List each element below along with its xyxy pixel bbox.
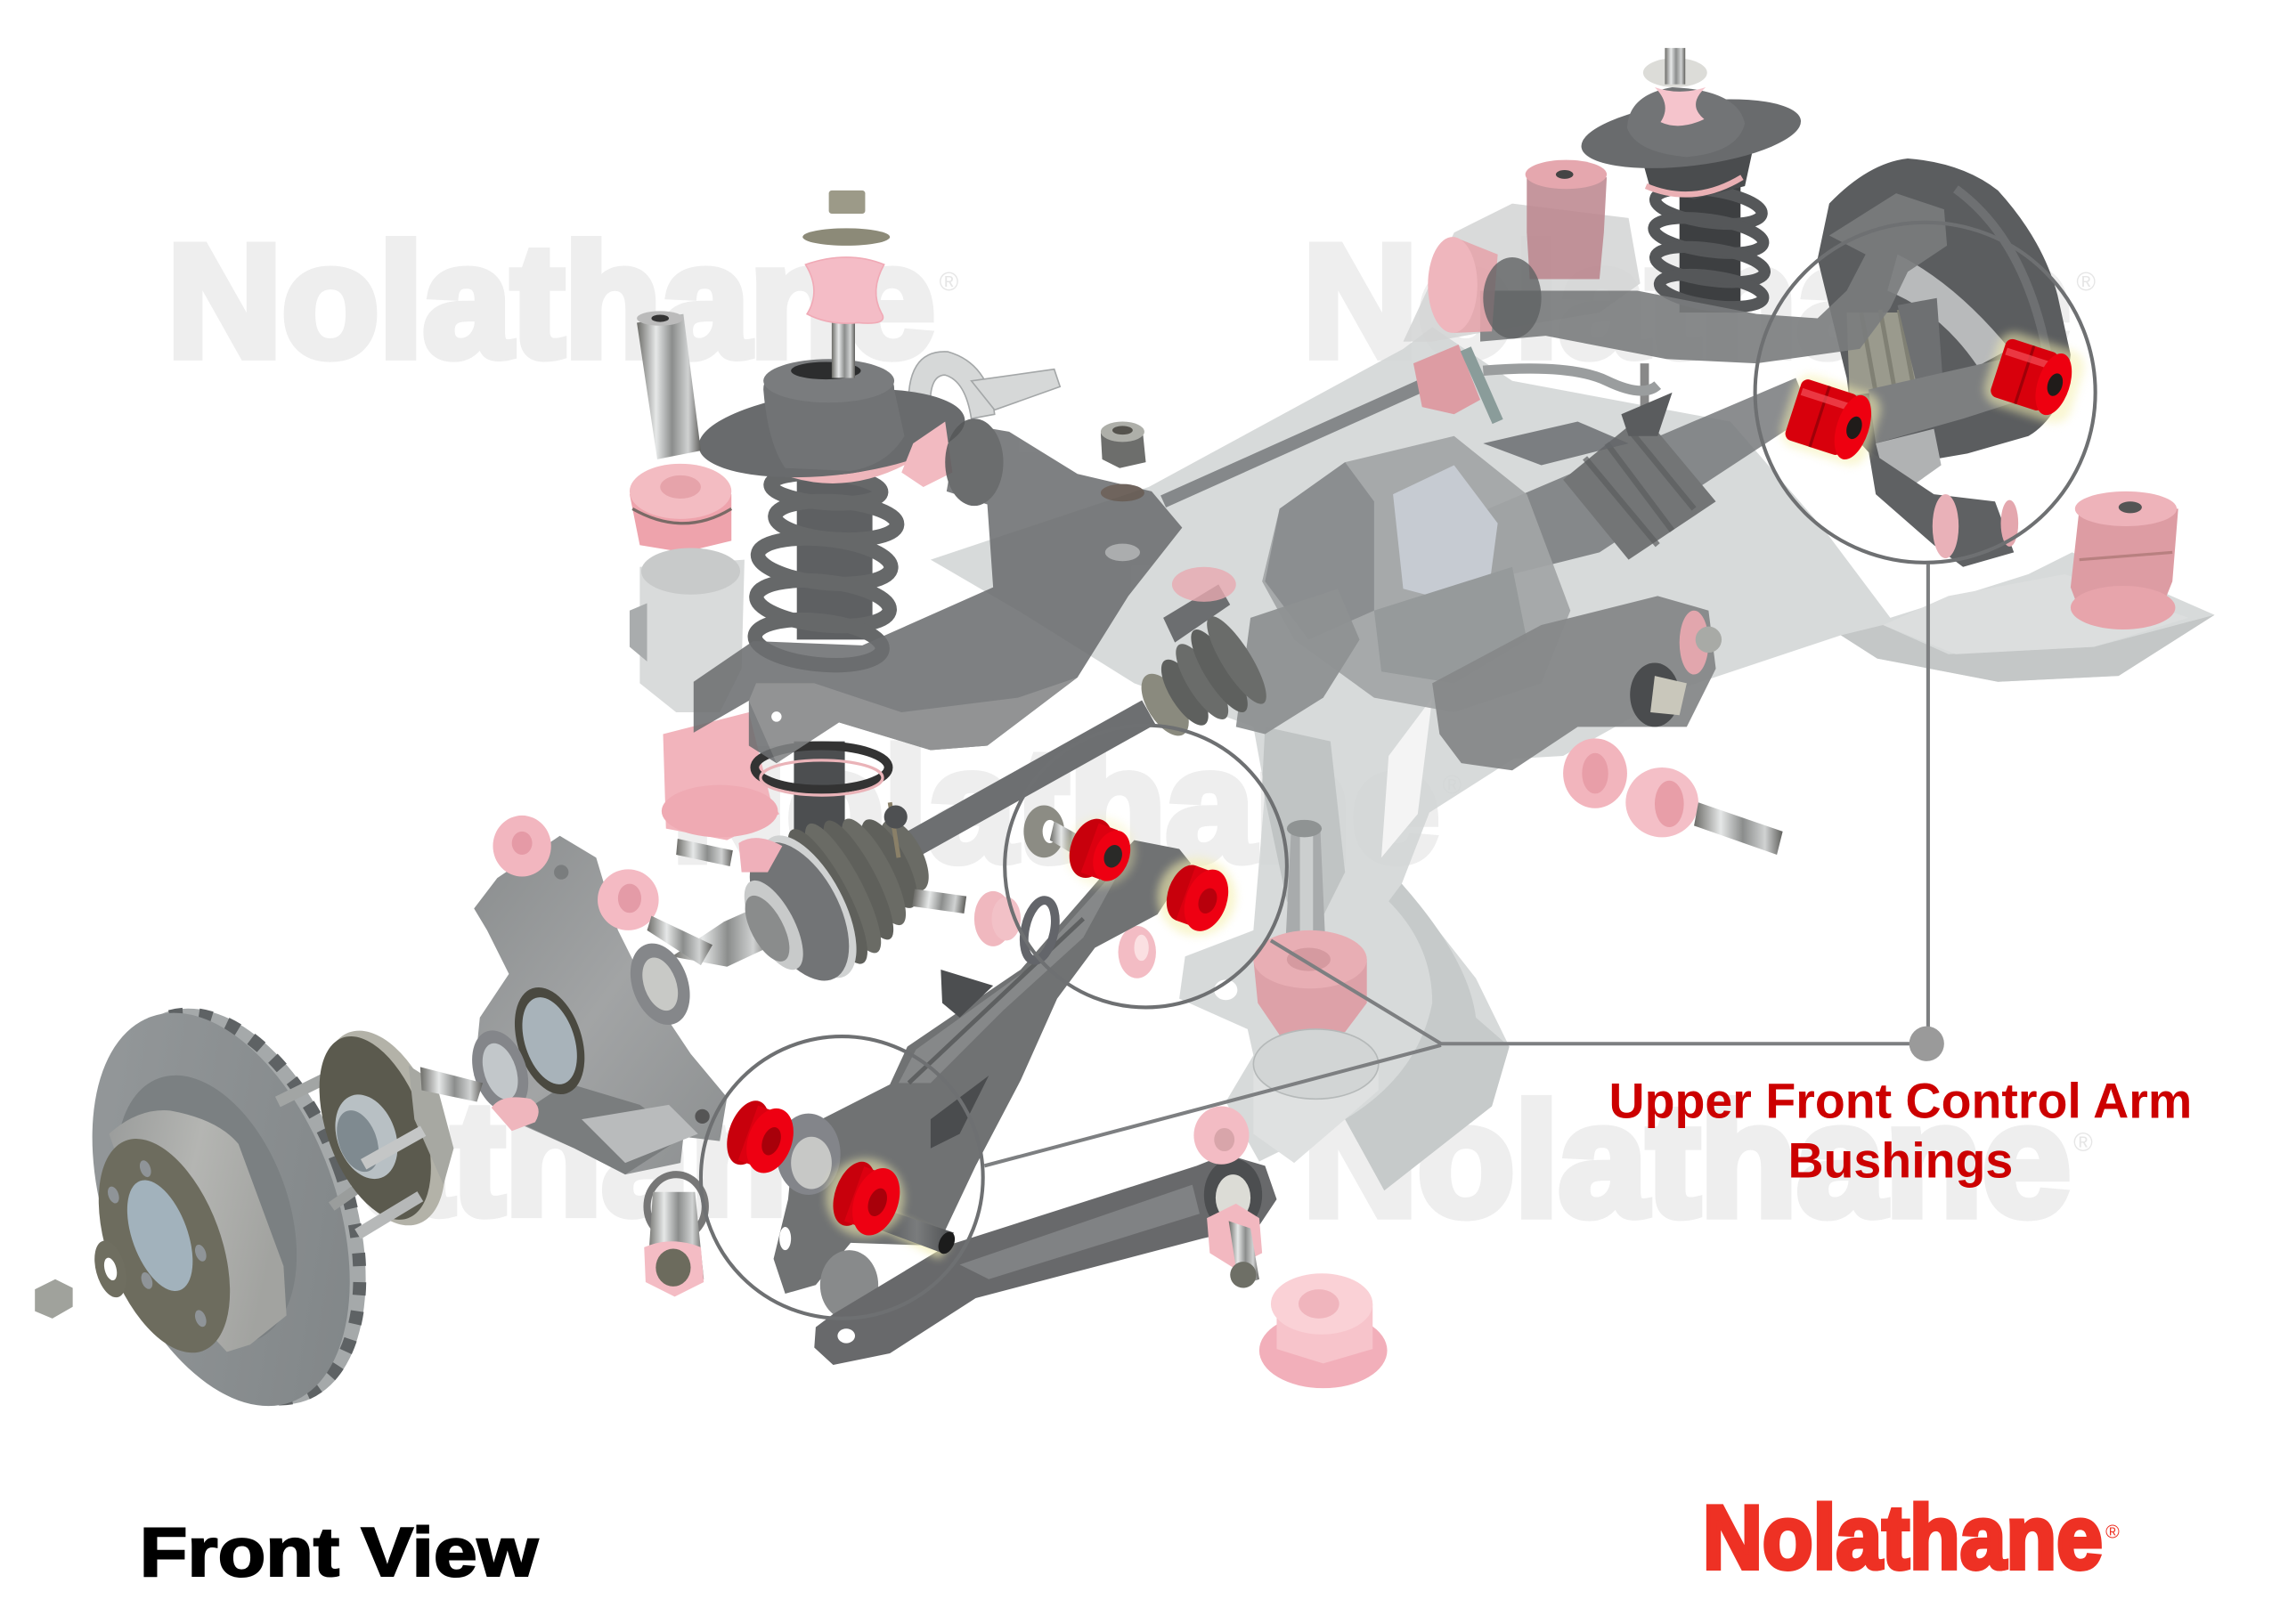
left lower bush stack [662, 712, 779, 840]
red bushing right top outer [1980, 328, 2089, 428]
spring and damper [1651, 175, 1767, 313]
washer small [89, 1238, 132, 1301]
ball joint link [884, 802, 908, 857]
left strut assembly [630, 191, 969, 840]
red bushing lower right [815, 1148, 916, 1248]
wheel hub [278, 1014, 483, 1242]
view title: Front View [140, 1513, 539, 1591]
spacer sleeve and pink bush near axle [676, 838, 782, 873]
callout dot [1910, 1027, 1944, 1061]
rear trailing arm with splined stub [1432, 596, 1722, 770]
brand logo: Nolathane [1703, 1488, 2103, 1588]
strut pink spring seat [778, 458, 908, 479]
rear pink mount bushing right [2071, 491, 2178, 629]
left upper control arm [694, 418, 1182, 763]
brake disc [43, 973, 416, 1441]
stud [832, 317, 855, 378]
watermark: bottom right Nolathane: ® [2073, 1128, 2093, 1157]
watermark: top right Nolathane: ® [2076, 268, 2096, 297]
link bushes [1193, 1106, 1262, 1288]
callout circle top right [1755, 223, 2096, 563]
damper column and spring [753, 465, 899, 840]
steel spacer washer [1023, 805, 1087, 857]
pink flanged bushing [630, 464, 731, 552]
top pink bushing and stud [1643, 48, 1707, 126]
differential housing [1262, 436, 1570, 712]
trailing control arm [774, 840, 1191, 1320]
grey cup [630, 548, 745, 712]
right brake backing plate [1818, 158, 2071, 501]
sway bar [1163, 381, 1432, 501]
hourglass pink bushing [805, 257, 884, 323]
red bushing lower left [719, 1095, 802, 1180]
top nut [829, 191, 865, 214]
knuckle pink bushes and bearing [493, 816, 712, 1033]
strut lower dome [1641, 152, 1752, 199]
rear pink diff bushes and sleeve [1563, 738, 1783, 855]
knuckle upright [462, 836, 727, 1174]
lower link arm [814, 1154, 1276, 1365]
watermark: centre Nolathane: Nolathane [672, 717, 1439, 896]
right axle boot and shaft [1454, 378, 1811, 581]
small hex collar [1101, 421, 1146, 468]
callout leader lines [984, 564, 1928, 1165]
red bushing centre upper [1056, 808, 1145, 897]
front CV boot and joint [672, 778, 966, 1005]
callout label: Upper Front Control Arm [1609, 1074, 2192, 1129]
right strut assembly [1577, 48, 1804, 313]
rear pink side mount [1428, 237, 1542, 338]
large pink flanged bushing [1259, 1273, 1388, 1388]
rear pink mount bushing top [1526, 160, 1607, 279]
pink small bushes centre [974, 891, 1156, 978]
callout circle centre [1005, 726, 1287, 1007]
watermark: bottom right Nolathane: Nolathane [1303, 1071, 2071, 1250]
pink rear bush behind arm [901, 421, 952, 487]
washer [802, 228, 890, 246]
watermark: top left Nolathane: ® [940, 268, 959, 297]
hub nut [35, 1279, 73, 1319]
steel sleeve [637, 311, 701, 459]
watermark: top right Nolathane: Nolathane [1303, 212, 2071, 391]
rear sway link and right lower link [1483, 363, 2018, 567]
strut top plate [1577, 87, 1804, 179]
brand logo: ® [2105, 1522, 2120, 1542]
upper right arm [1480, 193, 1947, 363]
right control arm link [1869, 353, 2036, 443]
rear crossmember subframe [931, 204, 2215, 1190]
knuckle lower pin [492, 1097, 705, 1296]
strut top plate [695, 359, 969, 489]
sway bar pink clamp [1413, 345, 1657, 421]
watermark: top left Nolathane: Nolathane [167, 212, 935, 391]
callout circle lower [701, 1036, 983, 1319]
red bushing centre lower [1146, 847, 1247, 947]
ring washer behind arm [1019, 897, 1060, 963]
watermark: centre Nolathane: ® [1443, 770, 1462, 800]
left upper stabiliser bracket [908, 352, 1060, 418]
front axle inner boot [1123, 567, 1360, 757]
steel pin [873, 1209, 958, 1259]
front axle shaft [901, 712, 1149, 850]
watermark: bottom left Nolathane: Nolathane [108, 1069, 875, 1248]
callout label: Bushings [1787, 1133, 2013, 1188]
centre pink bushing in crossmember [1253, 930, 1379, 1163]
arm hole detail [771, 711, 782, 722]
red bushing right top inner [1776, 370, 1885, 470]
